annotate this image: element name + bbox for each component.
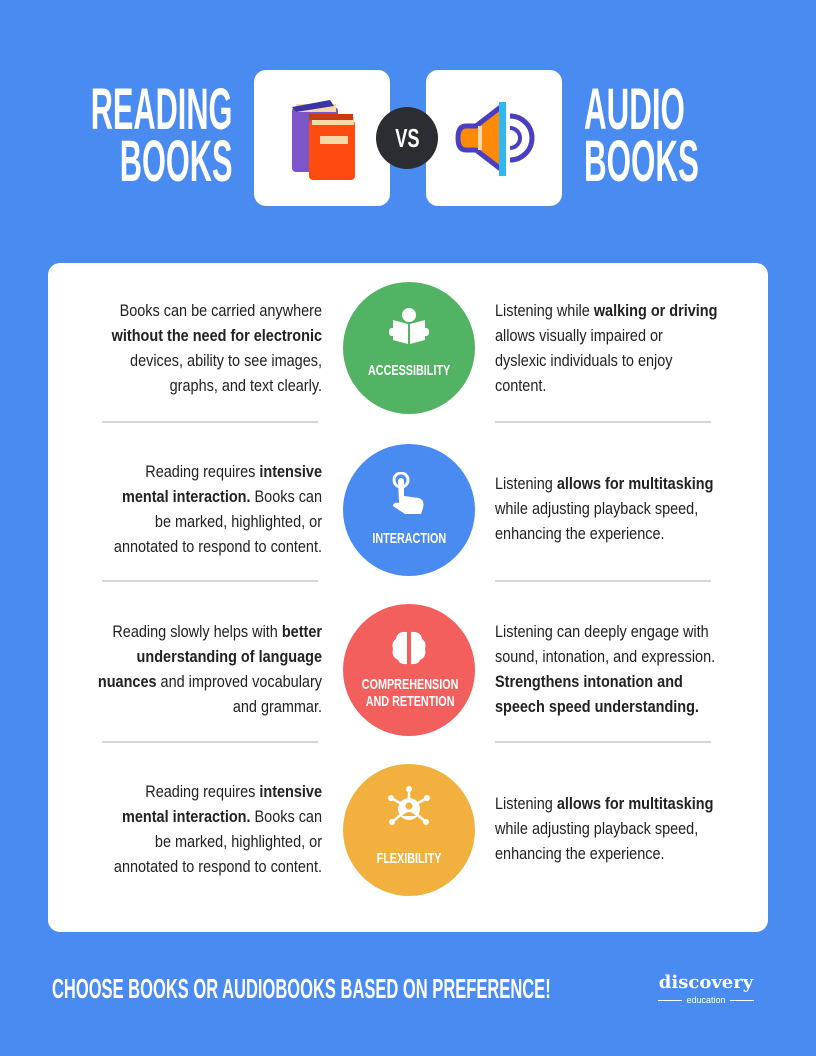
row 4 left text — [114, 782, 322, 876]
row 4 right text: enhancing the experience. — [495, 844, 665, 863]
row 1 left text: Books can be carried anywhere — [120, 301, 322, 320]
title: audio books: BOOKS — [584, 129, 699, 194]
row 4 right text — [495, 794, 713, 863]
row 2 right text: while adjusting playback speed, — [495, 499, 698, 518]
circle: interaction: INTERACTION — [372, 530, 446, 547]
row 1 left text — [112, 301, 322, 395]
row 1 left text: graphs, and text clearly. — [170, 376, 322, 395]
icon: vs badge: VS — [395, 123, 419, 153]
circle: accessibility — [343, 282, 475, 414]
row 3 left text — [98, 622, 322, 716]
row 1 right text: allows visually impaired or — [495, 326, 663, 345]
row 4 left text: Reading requires intensive — [145, 782, 322, 801]
row 2 left text: Reading requires intensive — [145, 462, 322, 481]
circle: comprehension: COMPREHENSION — [362, 676, 458, 693]
row 3 left text: nuances and improved vocabulary — [98, 672, 322, 691]
row 1 right text: content. — [495, 376, 546, 395]
circle: comprehension: AND RETENTION — [366, 693, 454, 710]
row 1 right text: Listening while walking or driving — [495, 301, 717, 320]
circle: comprehension — [343, 604, 475, 736]
row 3 left text: and grammar. — [233, 697, 322, 716]
row 1 right text — [495, 301, 717, 395]
circle: flexibility — [343, 764, 475, 896]
circle: accessibility: ACCESSIBILITY — [368, 362, 450, 379]
icon box: speaker — [426, 70, 562, 206]
row 3 right text: sound, intonation, and expression. — [495, 647, 715, 666]
circle: flexibility: FLEXIBILITY — [377, 850, 441, 867]
row 4 right text: Listening allows for multitasking — [495, 794, 713, 813]
row 3 left text: understanding of language — [137, 647, 322, 666]
row 2 left text — [114, 462, 322, 556]
row 3 right text: speech speed understanding. — [495, 697, 699, 716]
row 1 right text: dyslexic individuals to enjoy — [495, 351, 673, 370]
row 4 left text: mental interaction. Books can — [122, 807, 322, 826]
row 3 right text: Listening can deeply engage with — [495, 622, 709, 641]
title: reading books: BOOKS — [119, 129, 232, 194]
title: audio books: AUDIO — [584, 77, 685, 142]
title: audio books — [584, 77, 699, 194]
circle: interaction — [343, 444, 475, 576]
panel: comparison card — [48, 263, 768, 932]
row 1 left text: without the need for electronic — [112, 326, 322, 345]
row 4 left text: be marked, highlighted, or — [155, 832, 322, 851]
row 2 right text: Listening allows for multitasking — [495, 474, 713, 493]
row 4 left text: annotated to respond to content. — [114, 857, 322, 876]
row 4 right text: while adjusting playback speed, — [495, 819, 698, 838]
icon box: books — [254, 70, 390, 206]
row 2 left text: annotated to respond to content. — [114, 537, 322, 556]
row 2 right text: enhancing the experience. — [495, 524, 665, 543]
row 3 right text — [495, 622, 715, 716]
logo: discovery education: discovery — [659, 972, 753, 993]
row 2 left text: be marked, highlighted, or — [155, 512, 322, 531]
footer tagline: CHOOSE BOOKS OR AUDIOBOOKS BASED ON PREFERENCE! — [52, 973, 551, 1004]
row 2 left text: mental interaction. Books can — [122, 487, 322, 506]
logo: discovery education: education — [686, 995, 726, 1005]
row 3 left text: Reading slowly helps with better — [112, 622, 322, 641]
logo: discovery education — [658, 972, 754, 1005]
icon: vs badge — [376, 107, 438, 169]
row 1 left text: devices, ability to see images, — [130, 351, 322, 370]
title: reading books — [90, 77, 232, 194]
title: reading books: READING — [90, 77, 232, 142]
row 2 right text — [495, 474, 713, 543]
row 3 right text: Strengthens intonation and — [495, 672, 683, 691]
